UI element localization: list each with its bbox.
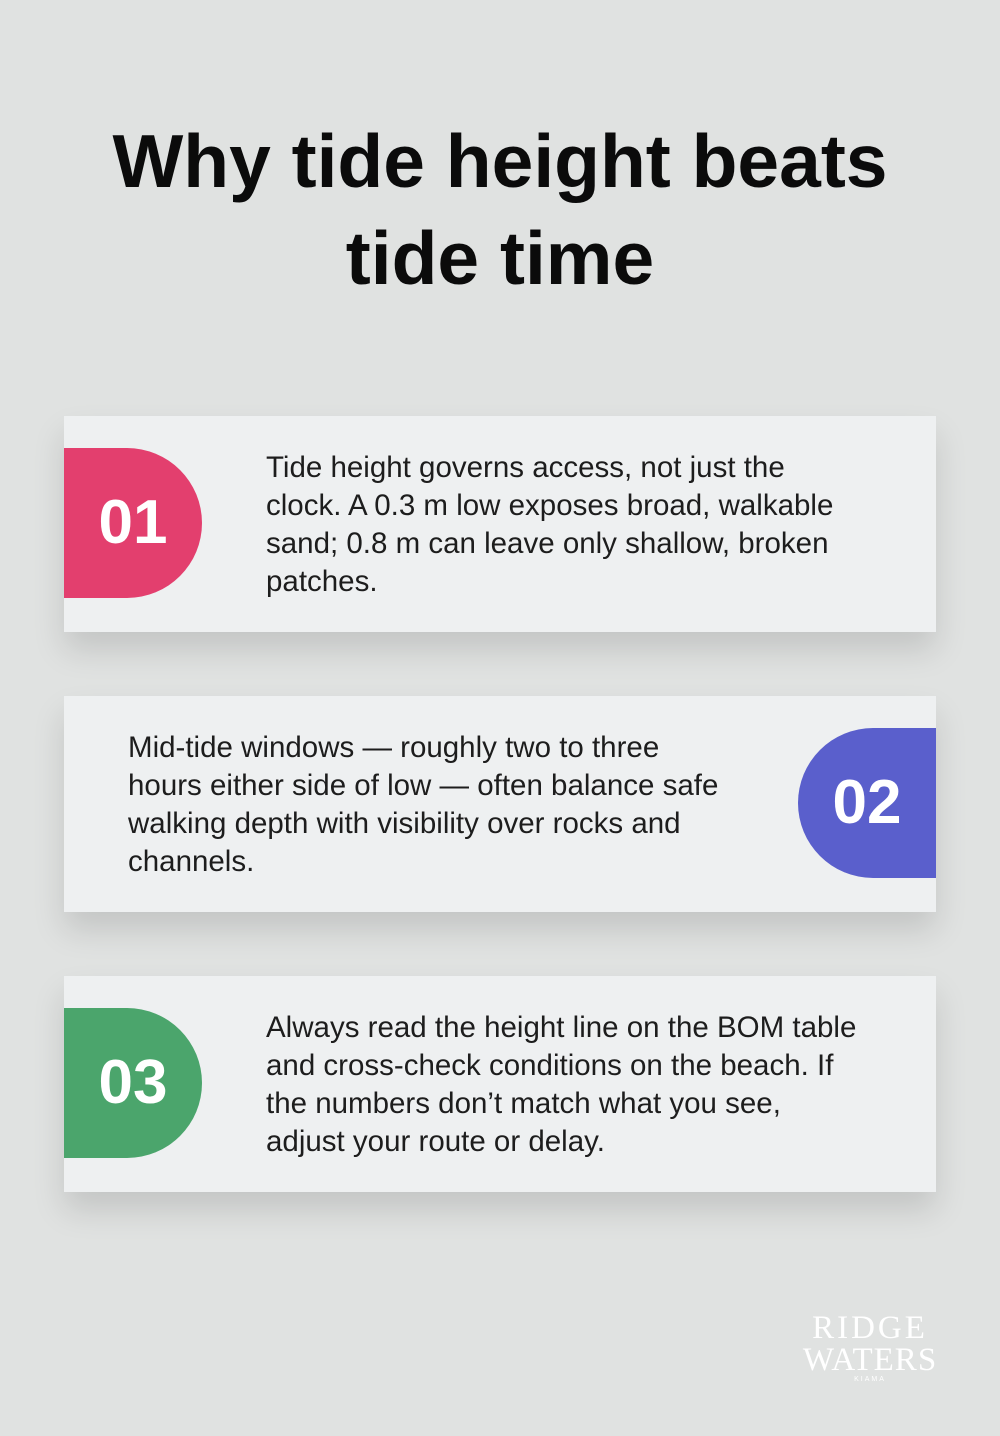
title: Why tide height beats bbox=[112, 119, 888, 203]
badge 01 bbox=[64, 448, 202, 598]
badge 02: 02 bbox=[833, 768, 901, 837]
logo: KIAMA bbox=[854, 1376, 886, 1383]
text 3: and cross-check conditions on the beach. If bbox=[266, 1049, 833, 1082]
text 3: adjust your route or delay. bbox=[266, 1125, 605, 1158]
text 1: sand; 0.8 m can leave only shallow, broken bbox=[266, 527, 828, 560]
badge 01: 01 bbox=[99, 488, 167, 557]
text 3: the numbers don’t match what you see, bbox=[266, 1087, 781, 1120]
text 2: hours either side of low — often balance safe bbox=[128, 769, 718, 802]
card 3 bbox=[64, 976, 936, 1192]
logo bbox=[803, 1310, 937, 1383]
badge 03 bbox=[64, 1008, 202, 1158]
text 1: clock. A 0.3 m low exposes broad, walkable bbox=[266, 489, 833, 522]
card 1 bbox=[64, 416, 936, 632]
logo: RIDGE bbox=[812, 1310, 928, 1346]
text 3 bbox=[266, 1011, 856, 1158]
text 3: Always read the height line on the BOM table bbox=[266, 1011, 856, 1044]
badge 03: 03 bbox=[99, 1048, 167, 1117]
text 2 bbox=[128, 731, 718, 878]
text 1 bbox=[266, 451, 833, 598]
text 1: patches. bbox=[266, 565, 378, 598]
text 2: channels. bbox=[128, 845, 254, 878]
badge 02 bbox=[798, 728, 936, 878]
logo: WATERS bbox=[803, 1342, 937, 1378]
text 2: Mid-tide windows — roughly two to three bbox=[128, 731, 659, 764]
title bbox=[112, 119, 888, 300]
card 2 bbox=[64, 696, 936, 912]
text 1: Tide height governs access, not just the bbox=[266, 451, 785, 484]
title: tide time bbox=[346, 216, 654, 300]
text 2: walking depth with visibility over rocks and bbox=[128, 807, 681, 840]
